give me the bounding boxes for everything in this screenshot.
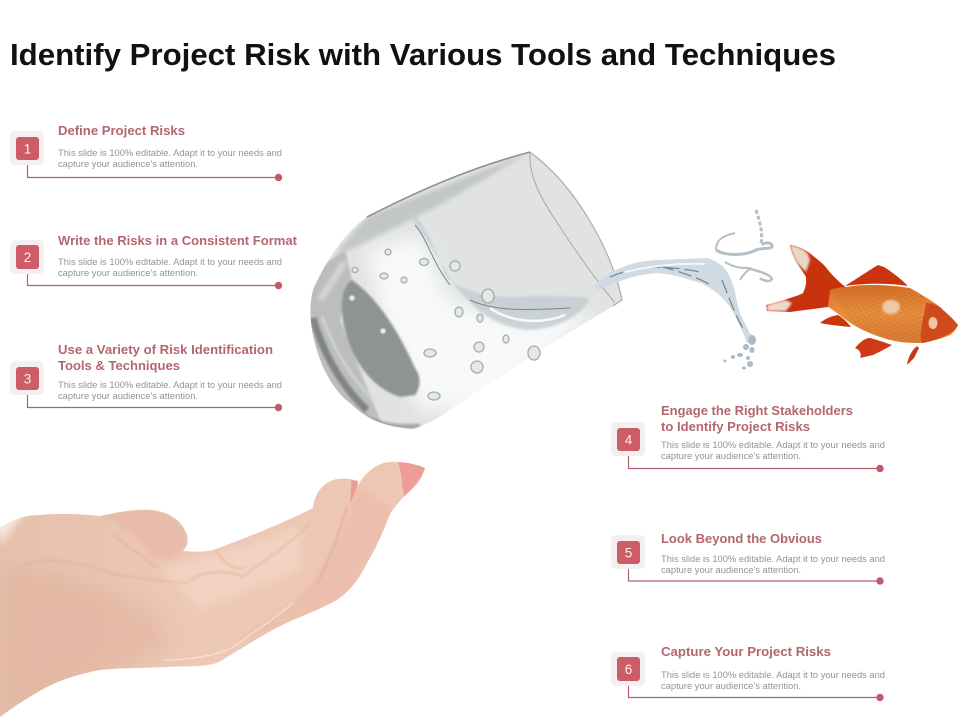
body text 1: This slide is 100% editable. Adapt it to your needs and (58, 148, 282, 158)
fish dorsal fin (845, 265, 908, 286)
hand: lower-left darker wrist (4, 576, 162, 708)
body text 5: This slide is 100% editable. Adapt it to your needs and (661, 554, 885, 564)
heading 2: Write the Risks in a Consistent Format (58, 233, 298, 248)
connector 6 (628, 686, 884, 701)
badge 4 (611, 422, 645, 456)
heading 3: Use a Variety of Risk Identification (58, 342, 273, 357)
badge 1: 1 (24, 142, 31, 156)
badge 2 (10, 240, 44, 274)
connector 5 (628, 569, 884, 585)
badge 1 (10, 131, 44, 165)
body text 6: capture your audience's attention. (661, 681, 801, 691)
fish tail tips (790, 245, 810, 272)
badge 6 (611, 652, 645, 686)
badge 2: 2 (24, 250, 31, 265)
fish tail fin (766, 245, 847, 312)
heading 5: Look Beyond the Obvious (661, 531, 822, 546)
fish head (921, 303, 958, 343)
step 1 (10, 123, 282, 181)
step 2 (10, 233, 298, 289)
hand: fingernails (398, 462, 425, 497)
splash upper loop (716, 210, 772, 281)
body text 2 (58, 257, 282, 278)
step 3 (10, 342, 282, 411)
water bubbles (349, 249, 540, 400)
hand: palm highlight (166, 530, 298, 606)
body text 4 (661, 440, 885, 461)
heading 4: Engage the Right Stakeholders (661, 403, 853, 418)
body text 1 (58, 148, 282, 169)
hand: creases (20, 523, 310, 583)
badge 6: 6 (625, 662, 632, 677)
body text 5: capture your audience's attention. (661, 565, 801, 575)
image: water stream splash (595, 210, 772, 370)
body text 6 (661, 670, 885, 691)
glass base disc (342, 280, 420, 397)
heading 6: Capture Your Project Risks (661, 644, 831, 659)
image: open hand (0, 455, 430, 720)
glass lower right fade (440, 305, 625, 430)
hand: shaded thumb (100, 510, 187, 559)
body text 6: This slide is 100% editable. Adapt it to your needs and (661, 670, 885, 680)
body text 3: capture your audience's attention. (58, 391, 198, 401)
glass thick base wall (310, 250, 384, 424)
water swirl inside glass (405, 208, 590, 330)
fish body (828, 285, 958, 343)
body text 3 (58, 380, 282, 401)
step 6 (611, 644, 885, 701)
badge 4: 4 (625, 432, 633, 448)
step 5 (611, 531, 885, 585)
body text 2: capture your audience's attention. (58, 268, 198, 278)
body text 2: This slide is 100% editable. Adapt it to your needs and (58, 257, 282, 267)
splash lower droplets (724, 335, 756, 370)
connector 4 (628, 456, 884, 472)
badge 5: 5 (625, 546, 632, 560)
hand: under-finger shade (268, 492, 392, 625)
hand: top-left fade (0, 517, 25, 544)
badge 3 (10, 361, 44, 395)
connector 1 (28, 165, 282, 181)
heading 3: Tools & Techniques (58, 358, 180, 373)
body text 4: capture your audience's attention. (661, 451, 801, 461)
fish scales (832, 287, 925, 342)
body text 4: This slide is 100% editable. Adapt it to your needs and (661, 440, 885, 450)
title: Identify Project Risk with Various Tools and Techniques (10, 37, 836, 72)
connector 3 (28, 395, 282, 411)
badge 5 (611, 535, 645, 569)
body text 5 (661, 554, 885, 575)
connector 2 (28, 274, 282, 289)
heading 1: Define Project Risks (58, 123, 185, 138)
glass top-left shade (337, 156, 522, 253)
glass dark band (313, 318, 367, 410)
glass bright lower area (365, 235, 600, 410)
glass rim (530, 153, 615, 303)
image: tilted glass of water (310, 151, 623, 429)
heading 4 (661, 403, 853, 434)
body text 1: capture your audience's attention. (58, 159, 198, 169)
image: goldfish (766, 245, 958, 365)
fish lower fins (820, 315, 851, 327)
badge 3: 3 (24, 372, 31, 386)
heading 3 (58, 342, 273, 373)
step 4 (611, 403, 885, 472)
body text 3: This slide is 100% editable. Adapt it to your needs and (58, 380, 282, 390)
heading 4: to Identify Project Risks (661, 419, 810, 434)
